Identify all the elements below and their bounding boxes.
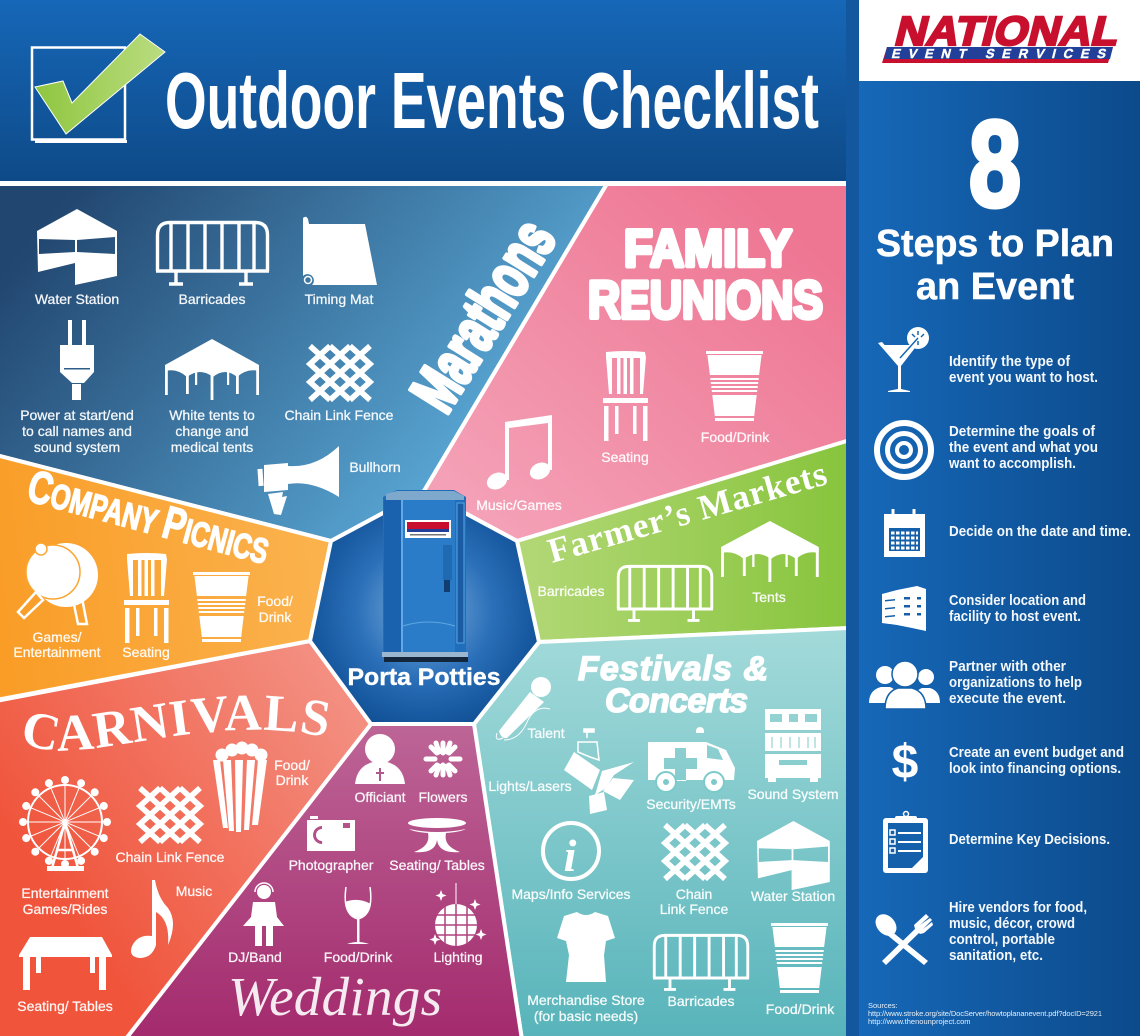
label: food/drink: Food/ <box>274 757 310 773</box>
label: talent: Talent <box>527 725 565 741</box>
text: facility to host event. <box>949 609 1081 625</box>
text: look into financing options. <box>949 761 1121 777</box>
label: seating/tables: Seating/ Tables <box>17 998 113 1014</box>
icon: music note <box>131 880 173 958</box>
icon: sound system <box>765 709 821 782</box>
label: food/drink <box>274 757 310 788</box>
label: entertainment games/rides <box>21 885 109 917</box>
text: Decide on the date and time. <box>949 524 1131 540</box>
text: organizations to help <box>949 675 1082 691</box>
icon: camera <box>307 816 355 851</box>
text: Identify the type of <box>949 354 1070 370</box>
panel: sidebar <box>859 0 1140 1036</box>
icon: calendar <box>884 509 925 557</box>
icon: chair <box>603 351 648 441</box>
text: Hire vendors for food, <box>949 900 1087 916</box>
label: food/drink: Food/Drink <box>701 429 770 445</box>
heading: steps to plan an event: an Event <box>916 266 1074 308</box>
icon: tent <box>721 521 819 582</box>
icon: white tent <box>165 339 259 400</box>
text <box>949 900 1087 964</box>
icon: chain link fence <box>310 346 370 400</box>
icon: timing mat <box>303 217 377 285</box>
heading: festivals and concerts <box>578 654 767 713</box>
label: sound system: Sound System <box>747 786 839 802</box>
icon: clipboard <box>883 812 928 873</box>
icon: people <box>869 661 940 709</box>
heading: carnivals: CARNIVALS <box>24 696 328 751</box>
label: games/entertainment: Entertainment <box>13 644 101 660</box>
panel: carnivals <box>0 643 372 1036</box>
sources: http://www.stroke.org/site/DocServer/howtoplananevent.pdf?docID=2921 <box>868 1009 1102 1018</box>
text: music, décor, crowd <box>949 916 1075 932</box>
icon: info circle <box>543 823 599 881</box>
label: food/drink: Food/ <box>257 593 293 609</box>
text: Create an event budget and <box>949 745 1124 761</box>
label: seating/tables: Seating/ Tables <box>389 857 485 873</box>
heading: steps to plan an event: Steps to Plan <box>876 223 1114 265</box>
label: power at start/end: Power at start/end <box>20 407 134 423</box>
icon: cup <box>706 351 763 421</box>
icon: checkbox with green check <box>32 34 165 143</box>
label: white tents: White tents to <box>169 407 255 423</box>
text <box>949 354 1098 386</box>
icon: flower <box>426 743 460 775</box>
icon: popcorn <box>213 742 268 832</box>
icon: officiant <box>355 734 405 784</box>
icon: music notes <box>484 415 553 493</box>
label: merchandise store: Merchandise Store <box>527 992 645 1008</box>
icon: barricades <box>653 935 749 989</box>
icon: microphone <box>496 677 551 740</box>
logo: National Event Services: EVENT SERVICES <box>890 46 1108 61</box>
text: Consider location and <box>949 593 1086 609</box>
label: barricades: Barricades <box>179 291 245 307</box>
icon: paddles <box>18 543 98 624</box>
sources: Sources: <box>868 1001 898 1010</box>
label: entertainment games/rides: Entertainment <box>21 885 109 901</box>
text <box>949 659 1082 707</box>
icon: dollar: $ <box>892 736 919 789</box>
sources: http://www.thenounproject.com <box>868 1017 971 1026</box>
label: games/entertainment: Games/ <box>32 629 82 645</box>
heading: steps to plan an event <box>876 223 1114 308</box>
icon: chair <box>124 553 169 643</box>
icon: dj <box>243 883 284 946</box>
label: barricades: Barricades <box>538 583 604 599</box>
icon: cocktail <box>878 327 929 392</box>
label: chain link fence <box>660 886 728 917</box>
heading: family reunions: REUNIONS <box>588 271 823 330</box>
icon: building <box>882 586 926 631</box>
heading: Marathons: Marathons <box>397 207 569 423</box>
label: entertainment games/rides: Games/Rides <box>23 901 107 917</box>
text <box>948 424 1098 472</box>
step 4 <box>882 586 1086 631</box>
icon: water station <box>757 821 830 890</box>
icon: ambulance <box>648 727 735 792</box>
label: maps/info services: Maps/Info Services <box>511 886 631 902</box>
label: dj/band: DJ/Band <box>228 949 282 965</box>
label: power at start/end <box>20 407 134 455</box>
icon: chain link fence <box>140 788 200 842</box>
icon: spoon and fork <box>871 910 933 965</box>
logo: National Event Services <box>859 0 1140 81</box>
label: seating: Seating <box>122 644 170 660</box>
icon: disco ball <box>430 883 486 946</box>
label: chain link fence: Link Fence <box>660 901 728 917</box>
panel: festivals and concerts <box>474 628 850 1036</box>
icon: water station <box>37 209 117 285</box>
step 1 <box>878 327 1098 392</box>
label: lights/lasers: Lights/Lasers <box>488 778 572 794</box>
text: Determine the goals of <box>949 424 1095 440</box>
icon: wine glass <box>345 887 371 944</box>
icon: round table <box>408 818 466 852</box>
label: games/entertainment <box>13 629 101 660</box>
panel: category wheel <box>0 186 846 1036</box>
label: timing mat: Timing Mat <box>305 291 373 307</box>
heading: farmer's markets: Farmer’s Markets <box>543 454 831 571</box>
title: Outdoor Events Checklist <box>165 56 819 145</box>
sources <box>868 1001 1102 1026</box>
icon: info circle: i <box>564 830 577 881</box>
text <box>949 745 1124 777</box>
icon: t-shirt <box>557 912 615 982</box>
label: photographer: Photographer <box>289 857 374 873</box>
icon: ferris wheel <box>19 776 111 871</box>
label: lighting: Lighting <box>433 949 483 965</box>
heading: company picnics: COMPANY PICNICS <box>22 459 275 574</box>
label: food/drink: Drink <box>276 772 309 788</box>
label: officiant: Officiant <box>354 789 406 805</box>
label: water station: Water Station <box>35 291 119 307</box>
label: food/drink: Food/Drink <box>324 949 393 965</box>
panel: marathons <box>0 182 608 541</box>
header banner <box>0 0 846 186</box>
icon: cup <box>771 923 828 993</box>
heading: family reunions: FAMILY <box>624 220 792 278</box>
icon: chain link fence <box>665 825 725 879</box>
step 8 <box>871 900 1087 965</box>
text: Partner with other <box>949 659 1066 675</box>
label: white tents: medical tents <box>171 439 253 455</box>
sticker logo <box>405 520 451 538</box>
text <box>949 593 1086 625</box>
heading: family reunions <box>589 228 824 321</box>
step 3 <box>884 509 1131 557</box>
label: tents: Tents <box>752 589 786 605</box>
logo: National Event Services: NATIONAL <box>891 8 1125 54</box>
step 5 <box>869 659 1082 709</box>
label: music/games: Music/Games <box>476 497 562 513</box>
icon: barricades <box>617 566 713 620</box>
label: water station: Water Station <box>751 888 835 904</box>
step 2 <box>877 423 1098 477</box>
text: sanitation, etc. <box>949 948 1043 964</box>
panel: weddings <box>122 724 522 1036</box>
panel: porta potties hub <box>310 490 539 724</box>
label: chain link fence: Chain <box>676 886 712 902</box>
label: flowers: Flowers <box>418 789 468 805</box>
text: execute the event. <box>949 691 1066 707</box>
label: power at start/end: sound system <box>34 439 120 455</box>
panel: farmer's markets <box>517 440 850 642</box>
heading: festivals and concerts: Concerts <box>605 682 748 720</box>
icon: table <box>19 937 112 990</box>
label: white tents: change and <box>175 423 249 439</box>
label: chain link fence: Chain Link Fence <box>285 407 394 423</box>
label: merchandise store <box>527 992 645 1024</box>
heading: weddings: Weddings <box>228 966 442 1027</box>
icon: stage light <box>564 729 634 814</box>
label: bullhorn: Bullhorn <box>349 459 401 475</box>
text: Determine Key Decisions. <box>949 832 1110 848</box>
label: food/drink <box>257 593 293 625</box>
label: music: Music <box>176 883 212 899</box>
step 7 <box>883 812 1110 873</box>
label: barricades: Barricades <box>668 993 734 1009</box>
label: chain link fence: Chain Link Fence <box>116 849 225 865</box>
label: merchandise store: (for basic needs) <box>534 1008 638 1024</box>
label: security/EMTs: Security/EMTs <box>646 796 736 812</box>
label: power at start/end: to call names and <box>22 423 132 439</box>
text: control, portable <box>949 932 1055 948</box>
label: food/drink: Food/Drink <box>766 1001 835 1017</box>
illustration: porta potty <box>382 490 468 662</box>
icon: power plug <box>60 320 94 400</box>
panel: company picnics <box>0 455 331 700</box>
panel: family reunions <box>424 182 850 541</box>
big numeral 8: 8 <box>969 96 1021 232</box>
label: seating: Seating <box>601 449 649 465</box>
label: food/drink: Drink <box>259 609 292 625</box>
label: porta potties: Porta Potties <box>348 664 500 691</box>
text: the event and what you <box>949 440 1098 456</box>
text: want to accomplish. <box>948 456 1076 472</box>
icon: target <box>877 423 931 477</box>
heading: festivals and concerts: Festivals & <box>578 650 768 688</box>
step 6 <box>892 736 1124 789</box>
icon: bullhorn <box>257 446 339 515</box>
icon: cup <box>193 572 250 642</box>
icon: barricades <box>156 222 269 284</box>
label: white tents <box>169 410 254 452</box>
text: event you want to host. <box>949 370 1098 386</box>
